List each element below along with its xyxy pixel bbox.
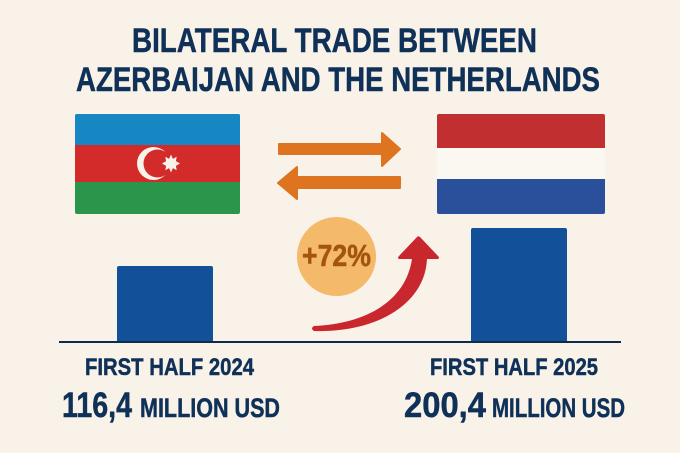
label: 116,4 million USD	[62, 386, 280, 425]
label: 116,4 million USD: MILLION USD	[140, 393, 280, 423]
title	[76, 22, 600, 99]
label: first half 2025: FIRST HALF 2025	[430, 354, 598, 381]
label: 200,4 million USD: 200,4	[404, 386, 486, 425]
callout: +72% badge	[297, 217, 376, 296]
bar: first half 2025	[471, 228, 567, 341]
label: 200,4 million USD: MILLION USD	[492, 393, 625, 423]
label: first half 2024: FIRST HALF 2024	[85, 354, 255, 381]
arrow: growth	[312, 236, 439, 331]
arrow: right	[279, 133, 400, 166]
bar: first half 2024	[117, 266, 213, 341]
callout: +72% badge: +72%	[302, 238, 371, 273]
axis	[59, 341, 621, 343]
bar chart	[59, 228, 621, 343]
label: 116,4 million USD: 116,4	[62, 386, 132, 425]
title: BILATERAL TRADE BETWEEN	[132, 22, 537, 60]
label: 200,4 million USD	[404, 386, 625, 425]
icon: exchange arrows	[278, 133, 400, 199]
arrow: left	[278, 167, 400, 199]
icon: Netherlands flag	[437, 114, 605, 214]
icon: Azerbaijan flag	[75, 114, 240, 214]
